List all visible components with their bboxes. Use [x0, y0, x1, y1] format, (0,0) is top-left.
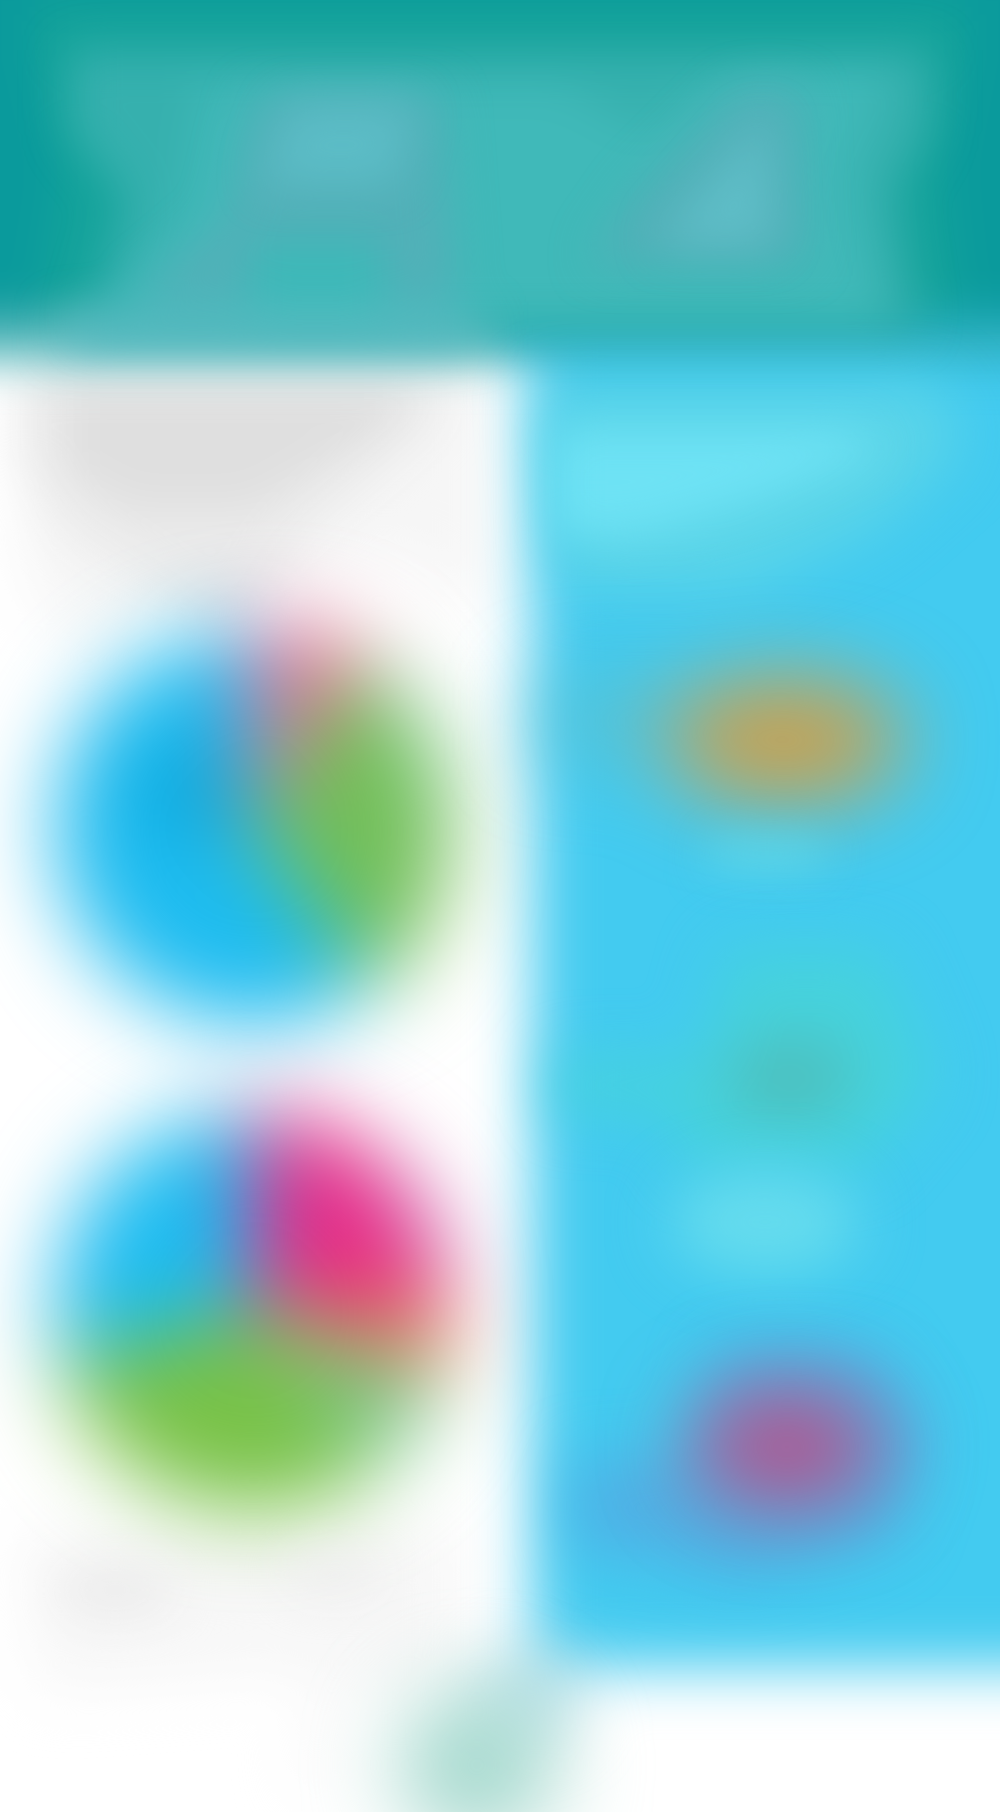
stat text: teal caption [670, 1170, 860, 1274]
stat text: gold caption [712, 842, 822, 866]
panel: right blue panel [470, 310, 1000, 1750]
pie chart: upper [55, 620, 451, 1025]
heading: left column title [20, 370, 440, 620]
header band [0, 0, 1000, 362]
header illustration shapes [60, 90, 805, 345]
header pale highlights [262, 105, 772, 245]
pie label: lower text hints [57, 1557, 385, 1616]
stat block: purple [570, 1350, 925, 1580]
panel: left column tint [20, 340, 490, 1790]
header inner glow [70, 50, 930, 330]
stat block: teal [555, 950, 935, 1170]
footer logo mark [397, 1687, 557, 1812]
stat block: gold [540, 678, 903, 802]
panel heading: right title [540, 385, 960, 590]
pie chart: lower [55, 1110, 451, 1511]
